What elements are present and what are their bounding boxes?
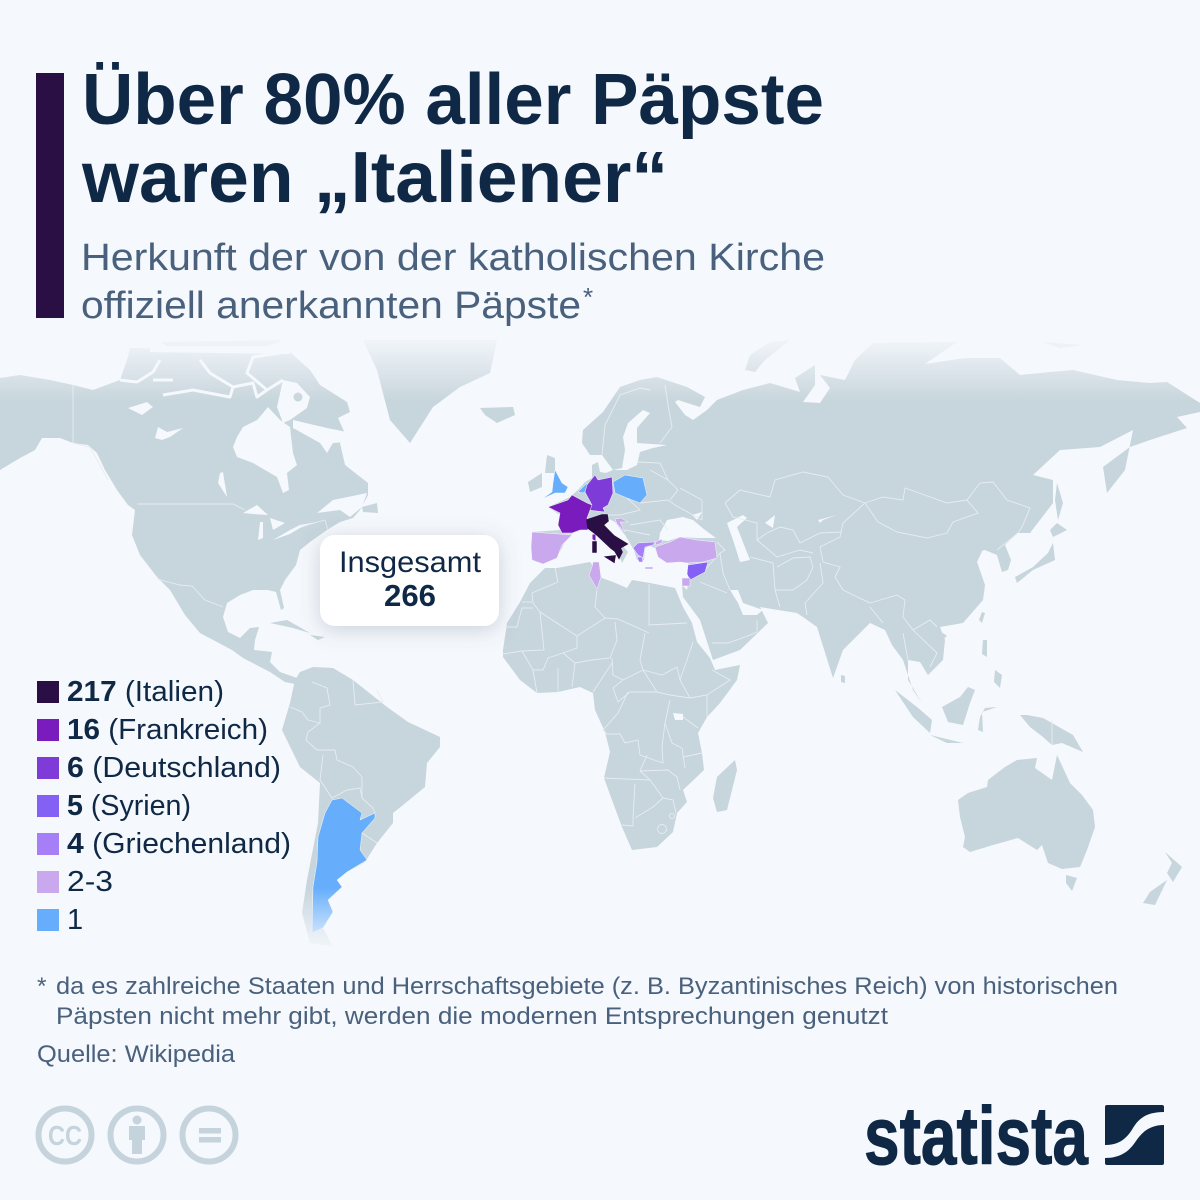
highlighted countries <box>312 470 717 933</box>
callout: total <box>320 535 499 626</box>
island in Foxe Basin <box>294 392 302 402</box>
footnote: da es zahlreiche Staaten und Herrschaftsgebiete (z. B. Byzantinisches Reich) von historischen <box>56 973 1118 1000</box>
Tunisia <box>589 562 601 589</box>
legend: 1: 1 <box>67 904 83 936</box>
icon: creative commons: CC <box>48 1120 82 1151</box>
Croatia <box>615 518 628 532</box>
land masses <box>0 340 1200 947</box>
title <box>81 60 824 218</box>
icon: creative commons <box>38 1108 92 1162</box>
callout: total: Insgesamt <box>339 546 482 579</box>
Corsica <box>593 535 595 540</box>
legend: Italien: 217 (Italien) <box>67 676 224 708</box>
subtitle <box>81 237 825 327</box>
Peloponnese <box>637 557 643 562</box>
footnote <box>37 973 1118 1030</box>
Turkey <box>655 537 717 563</box>
Syria <box>687 562 708 580</box>
legend: Frankreich: 16 (Frankreich) <box>67 714 268 746</box>
title: waren „Italiener“ <box>81 138 668 218</box>
accent bar <box>36 73 64 318</box>
footnote: * <box>37 973 47 1000</box>
country borders <box>73 385 1052 843</box>
logo mark <box>1105 1105 1164 1165</box>
legend: 2-3: 2-3 <box>67 866 113 898</box>
subtitle: offiziell anerkannten Päpste <box>81 285 581 327</box>
arctic channels <box>120 349 290 397</box>
top fade <box>0 330 1200 402</box>
icon: no derivatives <box>182 1108 236 1162</box>
Germany <box>585 475 613 512</box>
legend: Deutschland: 6 (Deutschland) <box>67 752 281 784</box>
Italy <box>587 515 627 558</box>
legend: 2-3 <box>37 866 113 898</box>
Crete <box>645 567 653 569</box>
icon: attribution <box>110 1108 164 1162</box>
Poland <box>613 475 647 503</box>
legend <box>37 676 291 936</box>
world map <box>0 330 1200 952</box>
legend: Syrien: 5 (Syrien) <box>67 790 191 822</box>
legend: 1 <box>37 904 83 936</box>
Spain and Portugal <box>531 532 572 564</box>
United Kingdom <box>542 470 568 499</box>
Sicily <box>606 556 615 562</box>
subtitle: * <box>583 282 593 312</box>
source: Quelle: Wikipedia <box>37 1041 235 1068</box>
title: Über 80% aller Päpste <box>82 60 824 140</box>
legend: Griechenland: 4 (Griechenland) <box>67 828 291 860</box>
seas and lakes <box>128 380 837 720</box>
Netherlands <box>578 483 587 493</box>
Thrace <box>655 539 662 545</box>
subtitle: Herkunft der von der katholischen Kirche <box>81 237 825 279</box>
statista logo: statista <box>864 1091 1089 1182</box>
Sardinia <box>593 542 596 552</box>
Israel <box>682 578 690 586</box>
footnote: Päpsten nicht mehr gibt, werden die modernen Entsprechungen genutzt <box>56 1003 888 1030</box>
bottom fade <box>290 888 350 952</box>
Greece <box>633 542 655 558</box>
France <box>548 495 592 533</box>
Argentina <box>312 798 375 933</box>
callout: total: 266 <box>384 578 436 613</box>
